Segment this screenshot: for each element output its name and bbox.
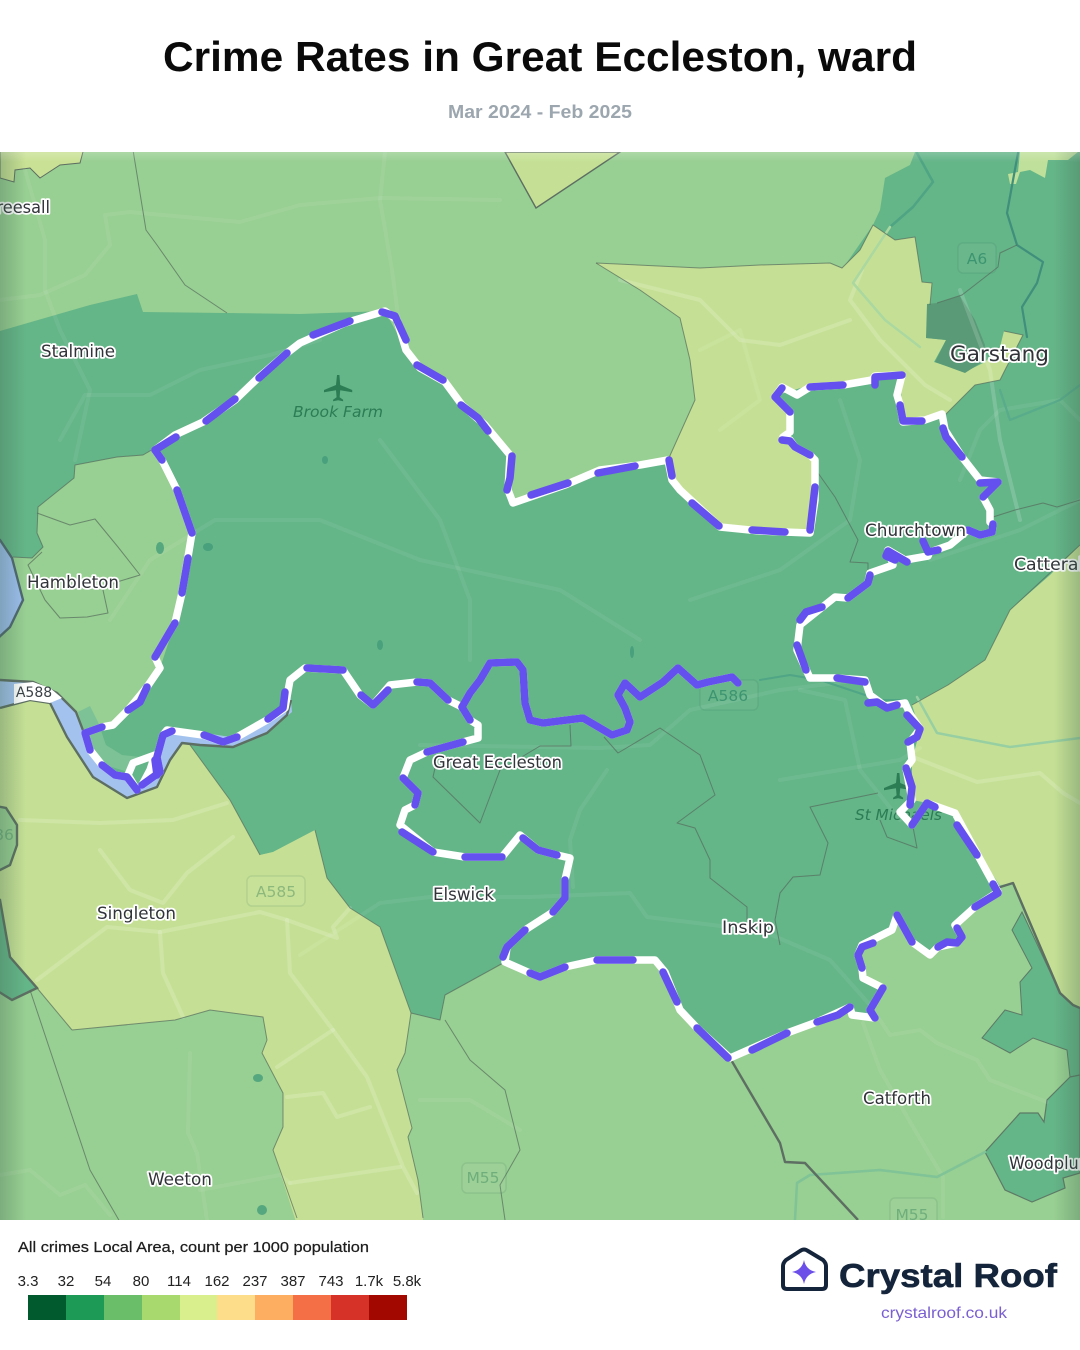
legend colour bar: [28, 1295, 407, 1320]
label: Singleton: Singleton: [97, 904, 176, 923]
label: Stalmine: Stalmine: [41, 342, 115, 361]
label: A588 road label on white: A588: [16, 685, 52, 701]
area: left-edge hexagon: [0, 806, 17, 872]
label: Catforth: Catforth: [863, 1089, 931, 1108]
label: St Michaels: St Michaels: [855, 806, 942, 824]
legend scale values: 80: [133, 1273, 149, 1290]
legend scale values: 1.7k: [355, 1273, 384, 1290]
area: bottom-right dark strip: [982, 912, 1080, 1077]
shield: M55 west: [462, 1163, 506, 1193]
legend scale values: 54: [95, 1273, 111, 1290]
legend scale values: 3.3: [18, 1273, 38, 1290]
rivers: teal streams: [760, 153, 1080, 1220]
legend scale values: 32: [58, 1273, 74, 1290]
area: Garstang darkest green: [926, 296, 985, 373]
icon: airfield St Michaels: [884, 773, 912, 799]
area: left edge dark green: [0, 900, 37, 1000]
area: light teal patch left of the ward at the river: [78, 706, 140, 772]
label: Inskip: Inskip: [722, 918, 774, 937]
shield: A6: A6: [967, 250, 987, 268]
label: Brook Farm: Brook Farm: [293, 403, 383, 421]
area: Woodplumpton dark green: [985, 1075, 1080, 1202]
legend scale values: 114: [167, 1273, 191, 1290]
area: dark green main zone including the ward: [0, 152, 1080, 1058]
legend scale values: 162: [204, 1273, 230, 1290]
legend scale values: 387: [280, 1273, 306, 1290]
label: Hambleton: Hambleton: [27, 573, 119, 592]
place labels: [0, 198, 1080, 1189]
legend title: All crimes Local Area, count per 1000 population: [18, 1239, 369, 1256]
website url: crystalroof.co.uk: [881, 1305, 1008, 1322]
ponds and specks: [156, 456, 634, 1215]
area: top-right yellow-green: [1008, 152, 1078, 184]
subtitle: date range: Mar 2024 - Feb 2025: [448, 101, 632, 122]
label: Elswick: Elswick: [433, 885, 494, 904]
legend scale values: 5.8k: [393, 1273, 422, 1290]
thick district boundaries: [730, 883, 1080, 1220]
shield: M55 east: [890, 1198, 937, 1230]
shield: M55 west: M55: [466, 1169, 500, 1187]
shield: A585: [247, 876, 305, 906]
icon: airfield Brook Farm: [324, 375, 352, 401]
ward boundary: purple dashes: [85, 312, 998, 1058]
thin area boundaries: [13, 150, 1080, 1222]
ward boundary: white base: [85, 311, 998, 1058]
logo: Crystal Roof: [783, 1250, 1058, 1322]
river bank outlines: [0, 700, 291, 798]
label: Weeton: Weeton: [148, 1170, 212, 1189]
shield: M55 east: M55: [895, 1206, 929, 1224]
title: Crime Rates in Great Eccleston, ward: [163, 33, 917, 80]
area: top triangle yellow-green: [505, 152, 620, 208]
shield: A586: A586: [708, 687, 748, 705]
roads: [0, 152, 1080, 1220]
map edge fade: [0, 152, 1080, 1220]
icon: house with star: [783, 1250, 826, 1289]
water: lake at Hambleton: [0, 540, 23, 640]
legend scale values: 237: [242, 1273, 268, 1290]
label: Churchtown: Churchtown: [865, 521, 966, 540]
wordmark: Crystal Roof: [839, 1257, 1058, 1294]
area: right yellow-green: [912, 545, 1080, 1008]
base layer: lighter green areas: [0, 152, 1080, 1220]
shield: A585: A585: [256, 883, 296, 901]
label: Garstang: Garstang: [950, 342, 1049, 366]
label: A588 road label on white: [14, 682, 62, 704]
road shields: [0, 243, 996, 1230]
shield: A586: [700, 680, 758, 710]
legend scale values: [18, 1273, 422, 1290]
label: Great Eccleston: Great Eccleston: [433, 753, 562, 772]
legend: [18, 1239, 422, 1320]
water: River Wyre: [0, 680, 292, 798]
legend scale values: 743: [318, 1273, 344, 1290]
area: Singleton yellow-green: [0, 700, 423, 1225]
area: Garstang yellow-green zone: [596, 225, 1023, 533]
area: top-left yellow-green: [0, 148, 84, 182]
shield: A6: [958, 243, 996, 273]
